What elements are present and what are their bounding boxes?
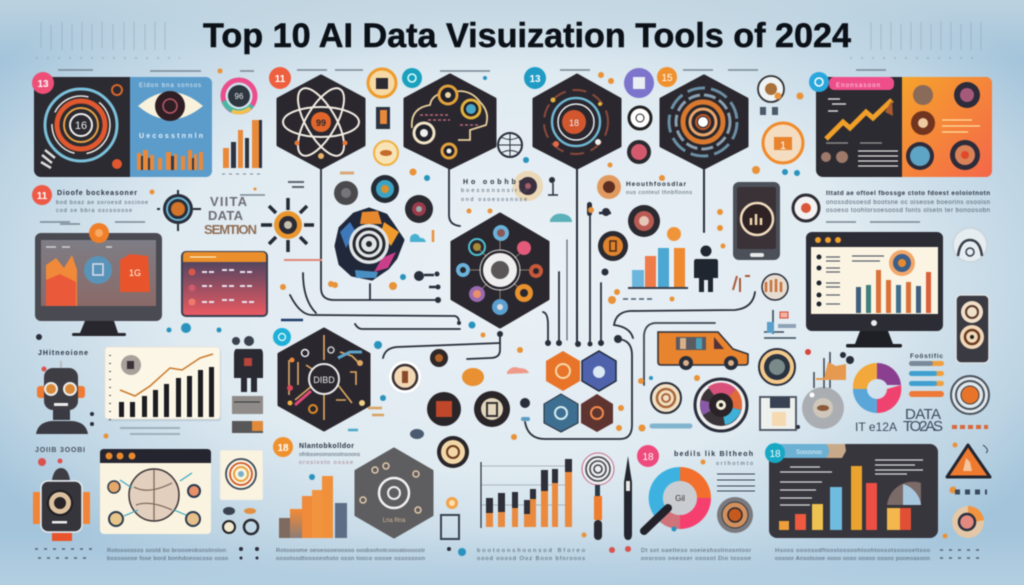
hexagon 1: atom: 99: [316, 118, 326, 128]
bottom caption 2: [276, 548, 425, 562]
bottom caption 3: [477, 548, 585, 562]
label robot 2: JOIIB 3OOBI: [35, 447, 85, 454]
speaker device: [956, 295, 989, 363]
target rings: 16: [75, 120, 87, 132]
hexagon 3: radial circuit: 18: [569, 118, 579, 128]
line and bar chart card: [105, 347, 221, 421]
badge 13: 13: [37, 79, 49, 90]
panel: tool 18 dark dashboard: Sooosnoo: [796, 450, 823, 456]
hexagon: circuit lower left: [279, 329, 369, 430]
badge 18 teal: 18: [769, 449, 781, 460]
pie chart with legend: [853, 353, 944, 413]
icon: swirl dial: [717, 497, 753, 533]
hexagon 3: radial circuit: [534, 75, 620, 168]
badge 13 blue: 13: [529, 74, 541, 85]
icons center row: [389, 349, 510, 539]
bottom caption 5: oosoor Ansotsooe oooo ooso oosoo ossoo pooeoasoon: [775, 556, 930, 562]
eye icon: [138, 91, 203, 121]
badge 18 teal: [765, 443, 785, 463]
tablet dashboard: [181, 251, 268, 317]
tool description 18 pink: [637, 445, 755, 491]
tool description center: ond osoesosnose: [461, 197, 527, 203]
icon: gear bottom right: [952, 506, 984, 538]
hexagon 1: atom: [278, 76, 364, 168]
tool description right center: [626, 181, 692, 196]
text: data tools: IT e12A: [855, 420, 897, 434]
panel: tool 18 dark dashboard: [765, 443, 938, 538]
tool description center: boesoonsnsircn: [461, 188, 527, 194]
hexagon: central network: [452, 214, 548, 327]
right monitor: [806, 232, 943, 348]
left monitor: 1G: [129, 268, 141, 278]
hexagon: circuit lower left: DIBD: [313, 375, 335, 385]
badge 11: [269, 67, 291, 89]
tool description 11: Dioofe bockeasoner: [57, 190, 137, 197]
bottom caption 2: oosotoodtoosoeohsto ossn tooco ooose ossossoon: [276, 556, 425, 562]
text: data section: SEMTION: [204, 222, 257, 237]
robot 2: [33, 468, 90, 541]
tool description 18 pink: orthotmto: [716, 461, 753, 467]
panel: tool dashboard top right: [809, 72, 992, 177]
icon: data sun gear: [261, 198, 314, 252]
browser card with brain: [100, 449, 211, 534]
small card with rings: [220, 450, 263, 500]
tool description top right: osoeso toohlorsoesoosd fonts olsetn ter bonoosobn: [826, 207, 991, 214]
hexagon 2: brain circuit: [405, 75, 495, 168]
magnifier: [582, 453, 614, 540]
tick marks: top right: [850, 21, 981, 58]
tool description 11: [32, 185, 148, 214]
badge 13: [32, 72, 54, 94]
tool description right center: ous conteul thnbfloons: [626, 190, 692, 196]
panel text: [139, 83, 203, 140]
bottom caption 2: Rotosoome oeoeoooeoosoo oosbsohotcoooatoooostr: [276, 548, 425, 554]
bottom caption 3: bootoonshoonsod Bforeo: [477, 548, 585, 554]
text: data tools: TO2AS: [903, 418, 943, 435]
tool description 11: bod boaz ae soroesd socinoe: [56, 200, 148, 206]
phone: [733, 182, 780, 260]
badge blue: [273, 328, 291, 346]
hexagon: gray tool: Lna Rna: [383, 518, 406, 524]
title: Top 10 AI Data Visuization Tools of 2024: [203, 17, 851, 55]
badge 13 blue: [524, 67, 546, 89]
icon: factory: [805, 349, 846, 388]
bar chart: bottom center: [481, 459, 572, 528]
mini bars: [137, 150, 203, 170]
bottom caption 1: [107, 548, 228, 562]
small node icons: [223, 507, 258, 534]
icons row top: 1: [780, 140, 786, 152]
bottom caption 4: Dt sot oaetteso ooeieshsotinosntoor: [641, 548, 751, 554]
tool description top right: onossdosoesd bootsne oc oiseose boeorins osooisn: [826, 199, 991, 206]
scattered decorative dots: [35, 68, 988, 560]
warning triangle: [947, 445, 990, 477]
badge 18 orange: 18: [277, 443, 289, 454]
text: data section: VIITA: [210, 194, 248, 209]
text: data section: DATA: [208, 208, 244, 223]
text: data section: [204, 194, 257, 237]
panel: tool 13 dashboard: [32, 72, 212, 177]
tool description center: Ho oobhbo: [463, 179, 523, 186]
person: middle right: [694, 246, 718, 292]
tick marks: top left: [36, 21, 180, 58]
panel text: Uecosstnnln: [139, 133, 203, 140]
tool description top right: [826, 190, 991, 214]
panel: tool dashboard top right: Enonsasoon: [836, 83, 880, 89]
icon: donut top left: [223, 80, 255, 113]
hexagon 4: concentric rings: [661, 76, 747, 168]
badge 15: [657, 67, 677, 87]
donut with magnifier: [644, 467, 711, 531]
pie chart with legend: Foöstific: [910, 353, 943, 360]
bottom caption 4: [641, 548, 751, 562]
bottom caption 1: bososoose fose bord bonhdoeoscoso ooso: [107, 556, 228, 562]
badge 11: 11: [275, 74, 286, 85]
tool description 18: orosiostn oosoe: [299, 460, 353, 466]
text: data tools: [855, 406, 943, 435]
tool description center: [461, 179, 527, 203]
dials row bottom right: [651, 349, 844, 431]
text: data tools: DATA: [905, 406, 941, 423]
badge 15: 15: [661, 73, 673, 84]
person: dark figure: [232, 336, 263, 433]
orange van: [658, 332, 748, 370]
bottom caption 5: Hsoos oooosodftoostoosoohtoohtoosotsooooeltsoo: [775, 548, 930, 554]
icons row top: [334, 68, 819, 261]
arrow chart: [826, 100, 892, 139]
small hexagon cluster: [544, 351, 616, 432]
tool description 18: Nlantobkolldor: [299, 443, 354, 450]
tool description top right: Ittatd ae oftoel fbossge ctoto fdoest eoloiotnotn: [826, 190, 990, 197]
tool description 18: ofnbsseoonsnostnsoons: [299, 452, 360, 458]
tool description 18: [273, 437, 360, 466]
badge 18 pink: 18: [642, 452, 654, 463]
icon: orbit top right of monitor: [953, 228, 987, 262]
bar chart top left: [222, 120, 262, 174]
tool description under chart: JHitneoione: [38, 350, 88, 357]
badge 11: 11: [37, 191, 48, 202]
tool description 11: cod se bbra oscsooose: [56, 208, 132, 214]
hexagon: gray tool: [356, 449, 432, 537]
badge: blue: [809, 72, 829, 92]
bottom caption 3: oood ooosd Ooz Booo bforooos: [477, 556, 585, 562]
tool description right center: Heouthfoosdlar: [626, 181, 686, 188]
icon: ring target right: [951, 376, 989, 414]
bar chart: middle right: [628, 227, 688, 289]
icon: target dial: [157, 190, 201, 231]
tool description 18 pink: bedils lik Bltheoh: [674, 451, 753, 458]
bottom caption 4: oosrooo ooeoser ooosot Dio toosoe: [641, 556, 751, 562]
icon: small building: [764, 310, 796, 338]
robot 1: [36, 361, 88, 434]
target rings: [45, 89, 117, 161]
donut with magnifier: Gil: [675, 494, 685, 503]
panel text: Eldon bna sonsos: [139, 83, 201, 89]
pen: [624, 456, 632, 540]
bottom caption 1: Rotosoossos sostd bo broooeobsnstirolon: [107, 548, 226, 554]
wiring network: [290, 168, 755, 439]
icon: dome cage: [733, 274, 788, 300]
icon: donut top left: 96: [235, 92, 244, 101]
bottom caption 5: [775, 548, 930, 562]
gear: colored cog: [336, 209, 403, 279]
orange bar chart: [279, 476, 347, 538]
left monitor: [35, 223, 162, 336]
